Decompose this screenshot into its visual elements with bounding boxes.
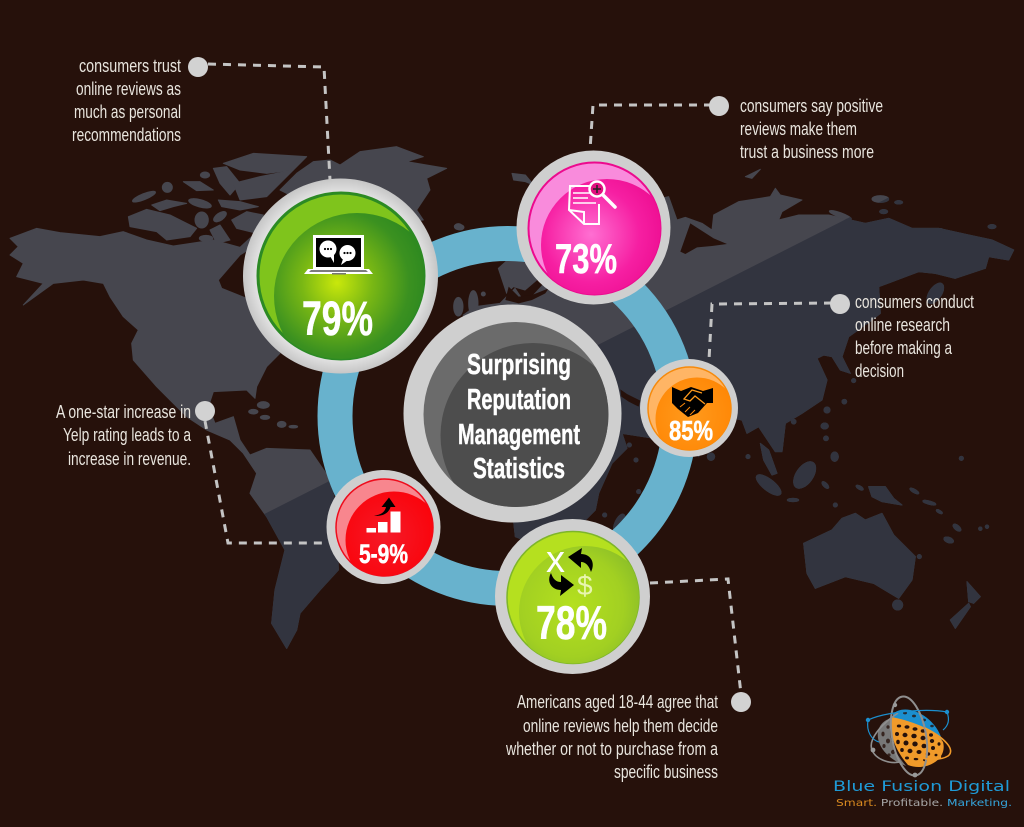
callout text: 79%: consumers trust: [79, 56, 181, 76]
value: 78%: 78%: [536, 596, 607, 649]
callout text: 5-9%: [56, 402, 192, 469]
icon: rising bars and arrow: [366, 498, 400, 532]
callout text: 78%: [505, 692, 719, 782]
connector: 85%: [709, 303, 832, 360]
callout text: 73%: consumers say positive: [740, 96, 883, 116]
logo globe: [866, 694, 951, 778]
icon: currency exchange: [546, 539, 593, 601]
stat circle: 85% orange: [640, 359, 738, 460]
callout text: 79%: much as personal: [74, 102, 181, 122]
value: 73%: 73%: [555, 235, 617, 282]
world map: [10, 147, 1014, 648]
icon: currency exchange: x: [546, 539, 565, 581]
callout text: 78%: Americans aged 18-44 agree that: [517, 692, 718, 712]
callout dot: 73%: [709, 96, 729, 116]
stat circle: 79% green: [243, 178, 440, 379]
callout text: 73%: trust a business more: [740, 142, 874, 162]
callout text: 5-9%: increase in revenue.: [68, 449, 191, 469]
callout text: 79%: online reviews as: [76, 79, 181, 99]
logo: Blue Fusion Digital: [833, 694, 1012, 809]
value: 85%: 85%: [669, 415, 713, 446]
icon: currency exchange: $: [577, 570, 593, 601]
icon: document with magnifier: [569, 182, 615, 224]
connector: 78%: [650, 579, 741, 694]
callout text: 73%: [740, 96, 883, 162]
callout text: 5-9%: A one-star increase in: [56, 402, 191, 422]
title text: [458, 349, 580, 485]
stat circle: 78% lime: [495, 519, 651, 678]
stat circle: 5-9% red: [326, 470, 442, 588]
callout text: 85%: online research: [855, 315, 950, 335]
callout text: 78%: online reviews help them decide: [523, 716, 718, 736]
connector: 5-9%: [205, 421, 328, 543]
callout text: 85%: decision: [855, 361, 904, 381]
callout dot: 79%: [188, 57, 208, 77]
value: 79%: 79%: [302, 293, 373, 346]
callout text: 85%: consumers conduct: [855, 292, 974, 312]
connector: 79%: [208, 64, 330, 180]
connector: 73%: [590, 105, 712, 150]
logo name: Blue Fusion Digital: [833, 779, 1010, 795]
icon: handshake: [672, 387, 713, 417]
logo tagline: Smart. Profitable. Marketing.: [836, 798, 1012, 809]
callout text: 73%: reviews make them: [740, 119, 857, 139]
stat circle: 73% pink: [516, 150, 673, 311]
callout dot: 78%: [731, 692, 751, 712]
blue connecting ring: [335, 244, 680, 588]
callout text: 79%: [72, 56, 181, 145]
title text: Statistics: [473, 453, 565, 485]
icon: laptop with speech bubbles: [304, 235, 373, 274]
callout text: 85%: [855, 292, 974, 381]
centre circle: title: [404, 304, 626, 528]
callout text: 5-9%: Yelp rating leads to a: [63, 425, 192, 445]
value: 5-9%: 5-9%: [359, 539, 408, 569]
title text: Reputation: [467, 384, 571, 416]
callout text: 85%: before making a: [855, 338, 953, 358]
callout dot: 5-9%: [195, 401, 215, 421]
callout dot: 85%: [830, 294, 850, 314]
title text: Management: [458, 419, 580, 451]
callout text: 79%: recommendations: [72, 125, 181, 145]
callout text: 78%: whether or not to purchase from a: [505, 739, 719, 759]
title text: Surprising: [467, 349, 571, 381]
callout text: 78%: specific business: [614, 762, 718, 782]
